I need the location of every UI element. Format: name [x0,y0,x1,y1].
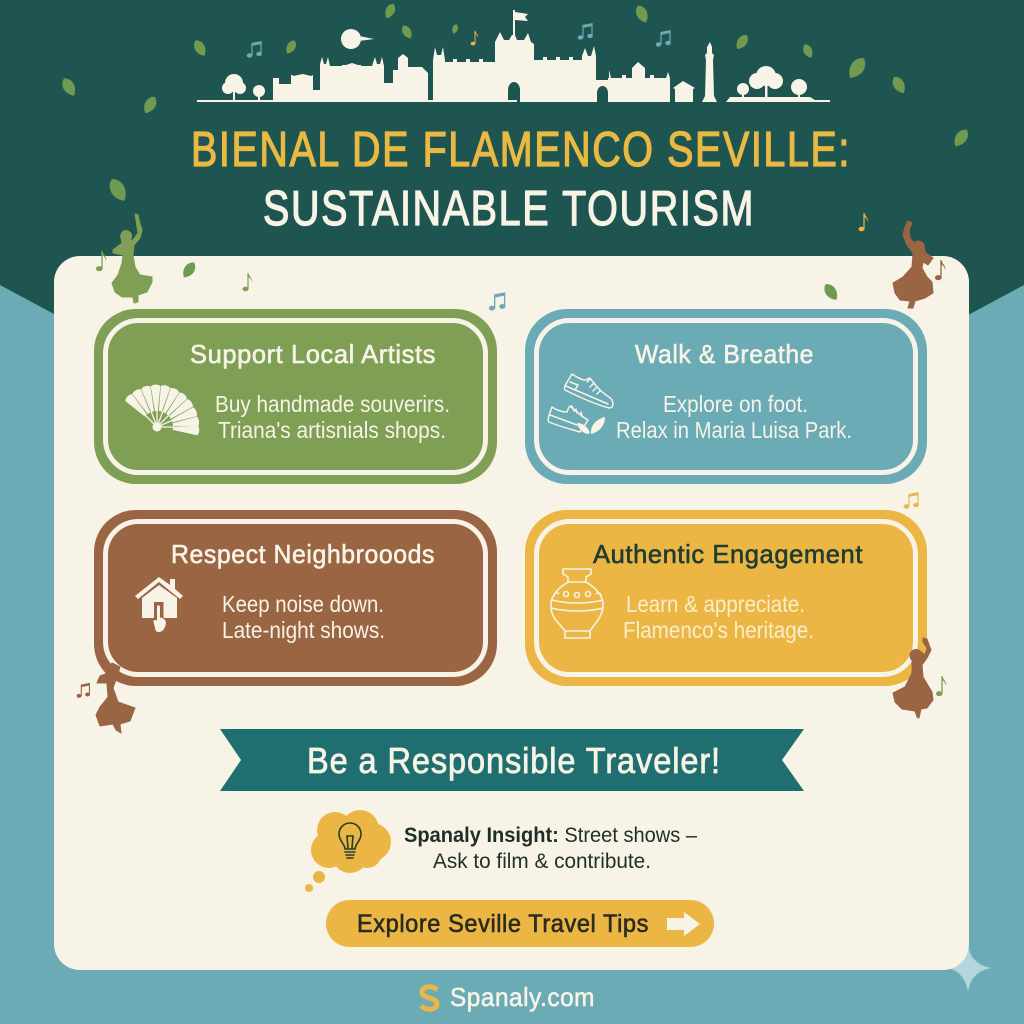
call to action button: Explore Seville Travel Tips [357,910,649,938]
heading: Walk & Breathe [635,339,814,369]
insight callout [305,810,697,892]
description [222,591,385,643]
dancer: green, top left [112,214,152,303]
arrow [667,912,700,936]
insight text [404,824,697,873]
panel: Authentic Engagement [525,510,927,686]
panel: cream card [54,256,969,970]
icon: fan [124,384,200,435]
ground line [197,100,517,102]
icon: ceramic vase [551,569,603,638]
bell tower [702,42,717,102]
insight text: Spanaly Insight: Street shows – [404,824,697,847]
heading: Support Local Artists [190,339,436,369]
description: Buy handmade souverirs. [215,391,450,417]
moon [341,29,374,49]
panel: Respect Neighbrooods [94,510,497,686]
central castle [433,10,596,102]
description: Explore on foot. [663,391,808,417]
icon: thought cloud with light bulb [305,810,391,892]
footer brand: Spanaly.com [450,982,595,1012]
main title: SUSTAINABLE TOURISM [263,182,755,236]
sparkle [947,945,992,992]
dancer: brown, lower right [893,638,933,718]
heading: Authentic Engagement [593,539,863,569]
right buildings [608,62,670,102]
skyline illustration [197,10,830,102]
main title [191,123,851,236]
panel: Support Local Artists [94,309,497,484]
description [623,591,814,643]
description [215,391,450,443]
call to action button [326,900,714,947]
description: Late-night shows. [222,617,385,643]
ribbon banner: Be a Responsible Traveler! [307,740,721,781]
dancer: brown, top right [893,221,933,308]
icon: house with finger [135,577,183,632]
description: Flamenco's heritage. [623,617,814,643]
small house [673,81,695,102]
gate lintel [596,80,610,102]
insight text: Ask to film & contribute. [433,850,651,873]
description: Keep noise down. [222,591,384,617]
description: Triana's artisnials shops. [218,417,446,443]
heading: Respect Neighbrooods [171,539,435,569]
icon: walking shoes [548,374,613,434]
icon: S logo [421,987,437,1009]
left trees [222,74,265,101]
description [616,391,852,443]
floating leaves [59,2,971,303]
floating music notes [77,23,946,698]
panel: Walk & Breathe [525,309,927,484]
main title: BIENAL DE FLAMENCO SEVILLE: [191,123,851,177]
dancer: brown, lower left [96,663,135,733]
right trees and mound [726,66,830,102]
dark green header [0,0,1024,560]
description: Learn & appreciate. [626,591,805,617]
description: Relax in Maria Luisa Park. [616,417,852,443]
ribbon banner [220,729,804,791]
left buildings [273,54,428,102]
